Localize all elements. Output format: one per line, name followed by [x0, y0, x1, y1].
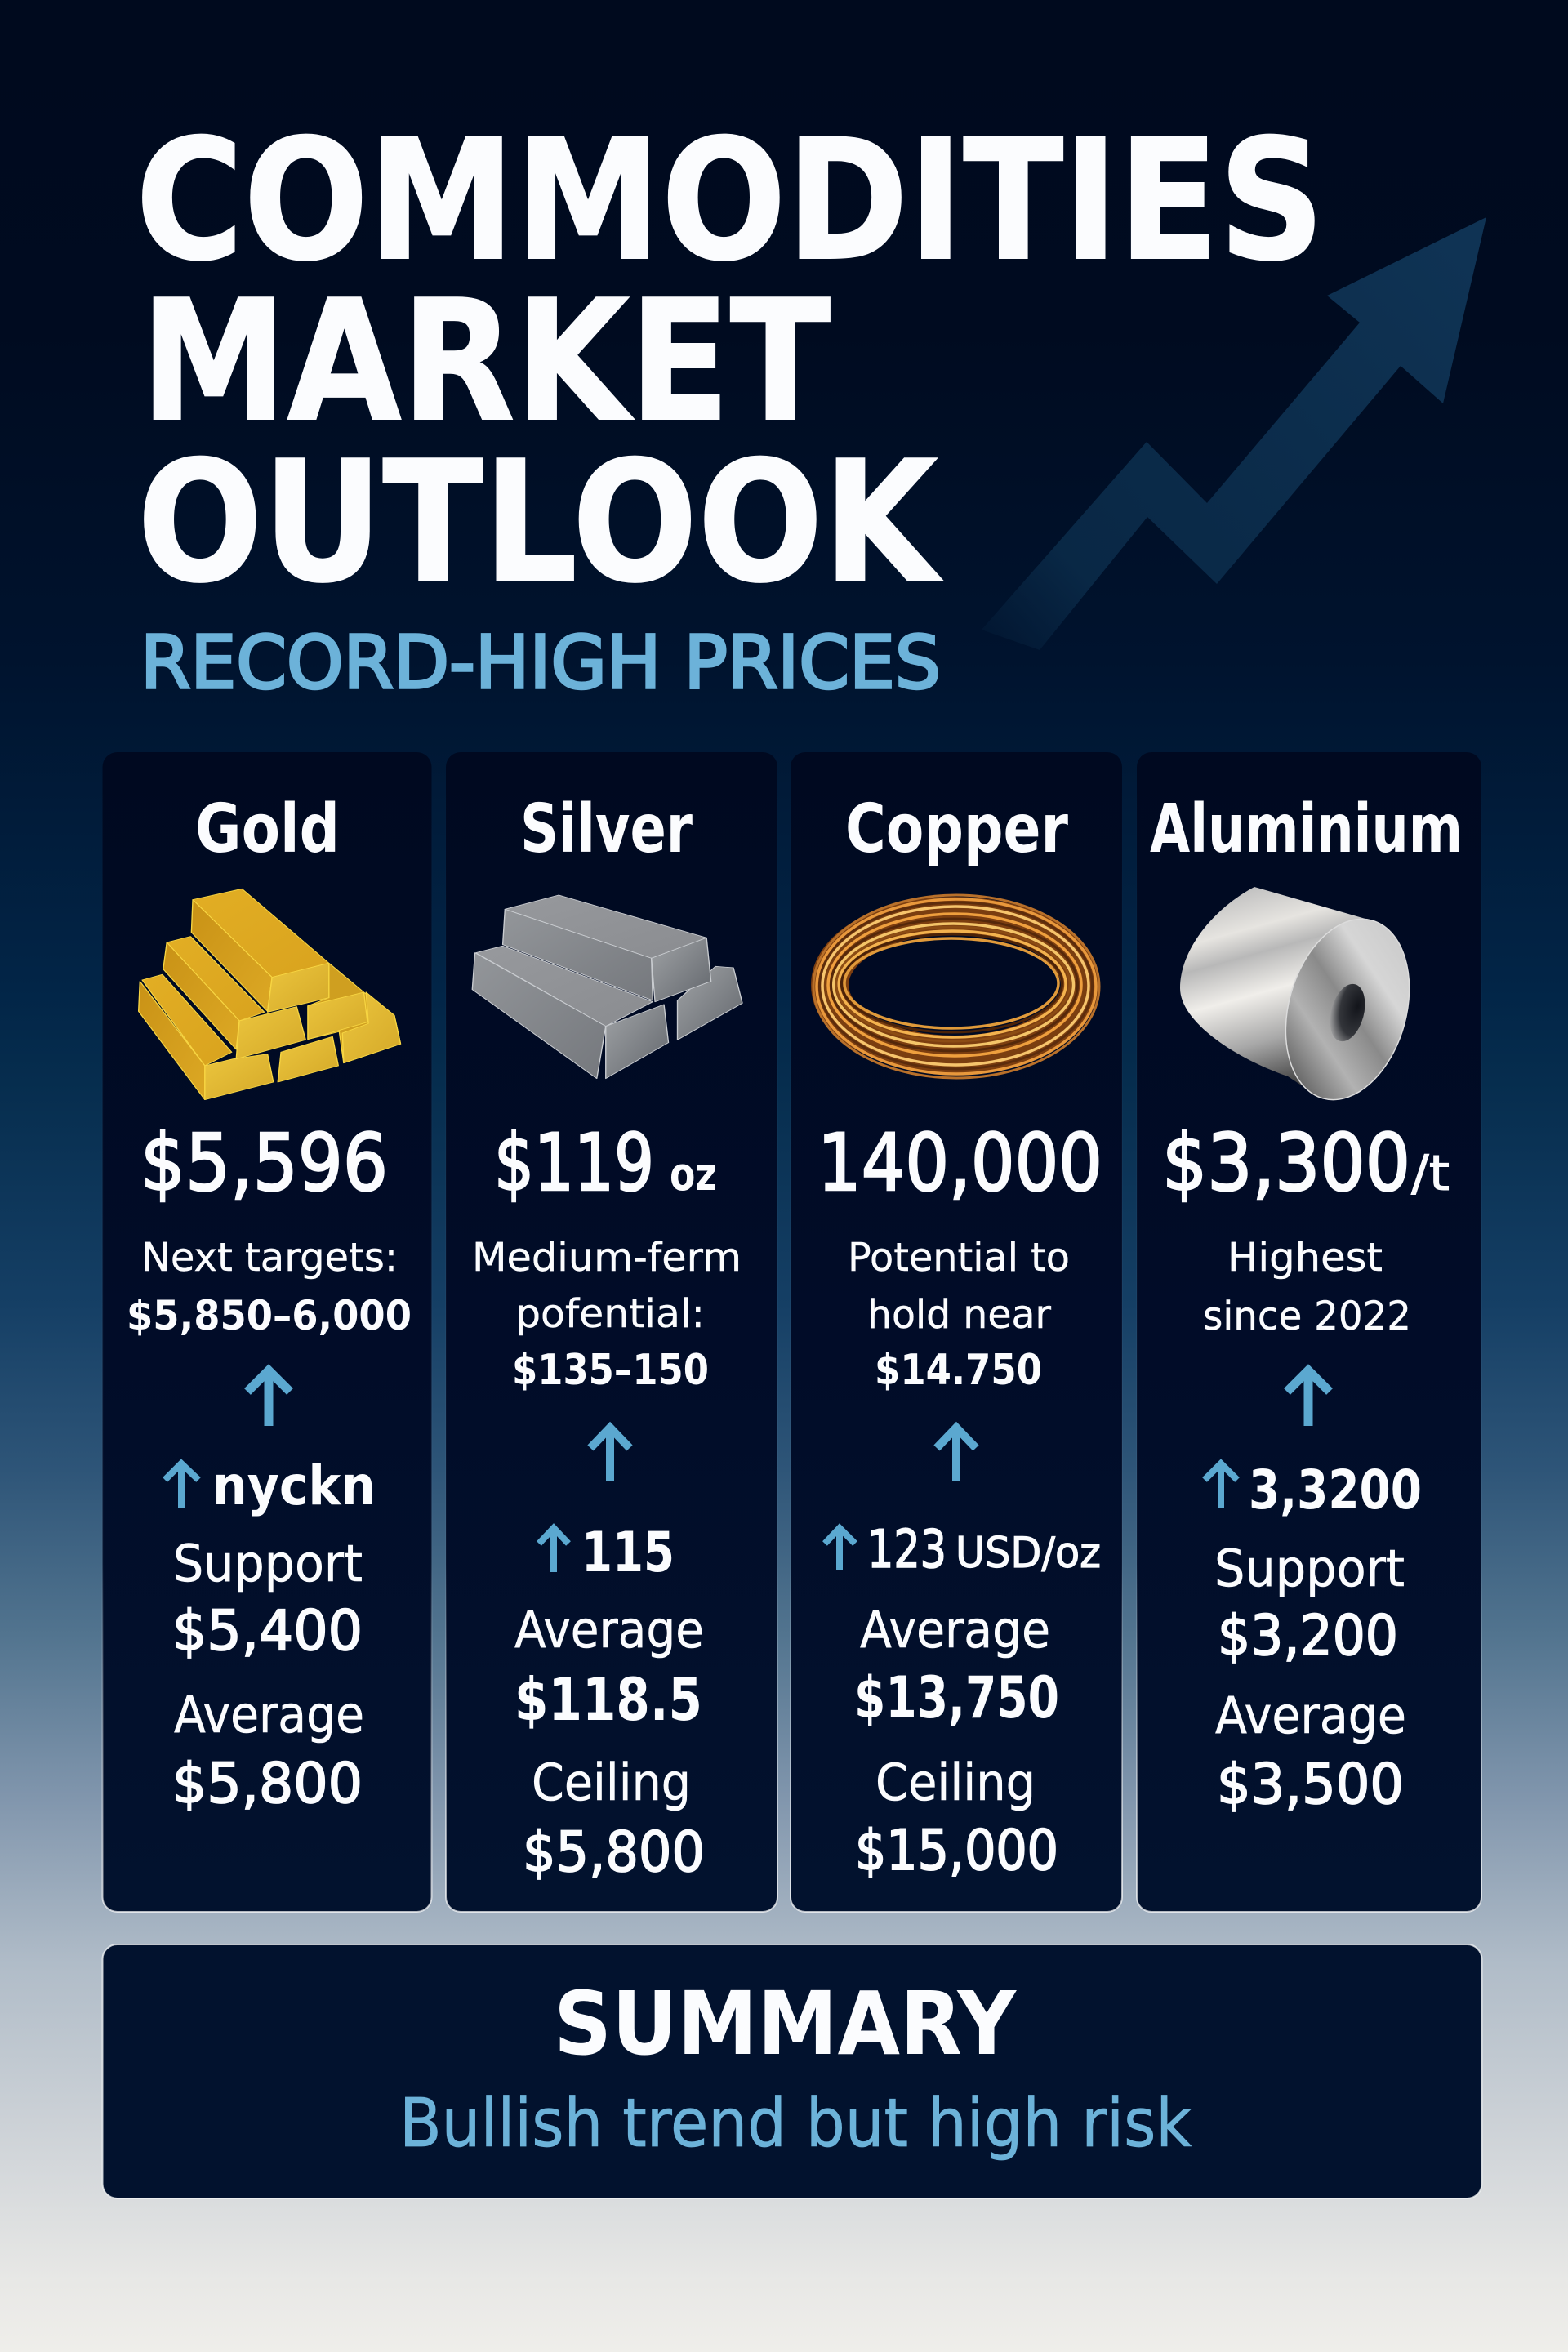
ceiling level: Ceiling — [532, 1753, 691, 1812]
summary text: Bullish trend but high risk — [399, 2085, 1192, 2163]
support level: Support — [1214, 1539, 1405, 1598]
silver outlook text: $135–150 — [512, 1346, 709, 1395]
title: OUTLOOK — [137, 426, 942, 620]
average level — [514, 1600, 704, 1734]
ceiling level — [523, 1753, 705, 1885]
support level: $5,400 — [172, 1599, 363, 1664]
average level — [172, 1685, 364, 1816]
average level — [854, 1600, 1059, 1731]
gold outlook text: Next targets: — [141, 1235, 398, 1281]
icon: small up arrow with value: USD/oz — [956, 1529, 1101, 1578]
panel: silver — [446, 752, 777, 1912]
aluminium outlook text: since 2022 — [1203, 1294, 1411, 1339]
silver price: $119 — [494, 1117, 654, 1209]
support level: Support — [173, 1534, 363, 1593]
icon: small up arrow with value: nyckn — [212, 1454, 376, 1517]
icon: up arrow — [937, 1428, 976, 1481]
average level: Average — [514, 1600, 704, 1659]
icon: small up arrow with value: 115 — [581, 1521, 675, 1585]
title: MARKET — [140, 265, 831, 459]
subtitle: RECORD-HIGH PRICES — [140, 620, 941, 705]
silver outlook text: pofential: — [515, 1291, 705, 1337]
title — [136, 105, 1325, 620]
silver price: oz — [670, 1148, 717, 1201]
icon: small up arrow with value: 123 — [867, 1520, 947, 1580]
heading: aluminium: Aluminium — [1150, 791, 1463, 868]
silver outlook text — [472, 1235, 742, 1395]
heading: silver: Silver — [520, 791, 693, 868]
panel: gold — [103, 752, 431, 1912]
gold price: $5,596 — [140, 1117, 388, 1209]
ceiling level: Ceiling — [875, 1753, 1036, 1812]
support level: $3,200 — [1218, 1604, 1398, 1668]
copper outlook text: $14.750 — [875, 1346, 1042, 1395]
heading: gold: Gold — [195, 791, 340, 868]
icon: up arrow — [1287, 1370, 1330, 1426]
icon: small up arrow with value — [539, 1521, 675, 1585]
panel: summary — [103, 1944, 1481, 2198]
ceiling level: $5,800 — [523, 1820, 705, 1885]
average level: Average — [174, 1685, 364, 1744]
average level: Average — [860, 1600, 1050, 1659]
average level — [1215, 1686, 1406, 1817]
heading: copper: Copper — [845, 791, 1068, 868]
copper outlook text: hold near — [867, 1292, 1051, 1338]
support level — [1214, 1539, 1405, 1668]
icon: aluminium coil — [1180, 887, 1428, 1114]
icon: up arrow — [247, 1370, 290, 1426]
ceiling level: $15,000 — [855, 1819, 1058, 1883]
icon: up arrow — [590, 1428, 630, 1481]
support level — [172, 1534, 363, 1664]
gold outlook text: $5,850–6,000 — [127, 1292, 412, 1339]
aluminium price: /t — [1411, 1145, 1450, 1202]
icon: rising trend arrow — [982, 217, 1486, 650]
copper outlook text: Potential to — [848, 1235, 1070, 1281]
copper price: 140,000 — [817, 1117, 1102, 1209]
gold outlook text — [127, 1235, 412, 1339]
ceiling level — [855, 1753, 1058, 1883]
icon: silver bars — [472, 895, 742, 1079]
title: COMMODITIES — [136, 105, 1325, 298]
copper outlook text — [848, 1235, 1070, 1395]
average level: $13,750 — [854, 1664, 1059, 1731]
icon: gold bars — [139, 889, 401, 1100]
average level: $5,800 — [172, 1752, 363, 1816]
aluminium outlook text: Highest — [1227, 1235, 1383, 1281]
icon: small up arrow with value: 3,3200 — [1249, 1459, 1422, 1521]
average level: $3,500 — [1217, 1753, 1404, 1817]
silver outlook text: Medium-ferm — [472, 1235, 742, 1281]
average level: Average — [1215, 1686, 1406, 1745]
panel: copper — [791, 752, 1122, 1912]
icon: copper wire coil — [813, 895, 1099, 1078]
panel: aluminium — [1137, 752, 1481, 1912]
aluminium price: $3,300 — [1162, 1117, 1410, 1209]
summary heading: SUMMARY — [554, 1974, 1017, 2075]
icon: small up arrow with value — [1205, 1459, 1422, 1521]
average level: $118.5 — [514, 1665, 702, 1734]
aluminium outlook text — [1203, 1235, 1411, 1339]
icon: small up arrow with value — [825, 1520, 1101, 1580]
